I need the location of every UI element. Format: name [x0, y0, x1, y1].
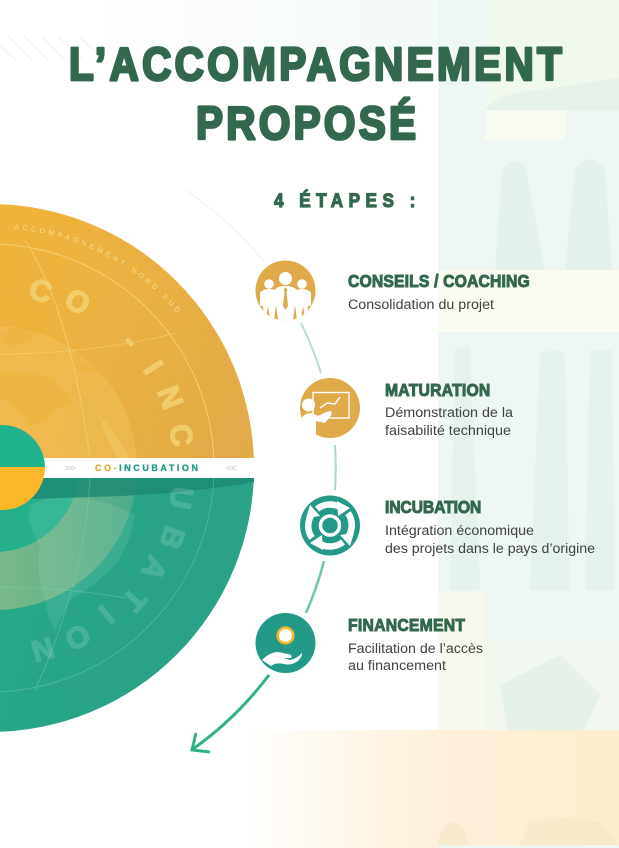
step 4 text: FINANCEMENT [348, 615, 465, 635]
step 3 text: INCUBATION [385, 497, 481, 517]
globe: curved letters CO-INCUBATION: N [28, 630, 58, 667]
globe: curved letters CO-INCUBATION [26, 273, 199, 667]
step 1 text: Consolidation du projet [348, 297, 494, 312]
globe: curved letters CO-INCUBATION: A [134, 550, 173, 586]
step 2 text: MATURATION [385, 380, 490, 400]
title: PROPOSÉ [196, 99, 416, 150]
step 3 text: des projets dans le pays d’origine [385, 541, 595, 556]
globe: curved letters CO-INCUBATION: N [150, 382, 189, 414]
title: L’ACCOMPAGNEMENT [69, 40, 562, 91]
timeline arc [185, 190, 336, 613]
globe: curved letters CO-INCUBATION: - [115, 326, 146, 356]
globe: curved letters CO-INCUBATION: C [162, 422, 199, 449]
globe: upper gold half [0, 204, 254, 458]
step 4 text: Facilitation de l’accès [348, 641, 483, 656]
icon: hand with coin [256, 613, 316, 673]
arrow [192, 675, 269, 752]
globe: curved letters CO-INCUBATION: I [92, 598, 120, 629]
icon: team [256, 260, 316, 322]
globe: curved letters CO-INCUBATION: U [163, 484, 199, 511]
decorative hatch [0, 35, 105, 60]
globe: curved letters CO-INCUBATION: O [59, 617, 95, 657]
step 3 text [385, 497, 595, 556]
globe: curved letters CO-INCUBATION: C [26, 273, 56, 310]
step 2 text [385, 380, 514, 438]
step 4 text: au financement [348, 658, 446, 673]
band label: co-incubation: CO- INCUBATION [95, 463, 198, 473]
band label: co-incubation [64, 463, 237, 473]
step 2 text: Démonstration de la [385, 405, 514, 420]
globe: lower teal half [0, 478, 254, 732]
band label: co-incubation: >>> [64, 463, 76, 473]
globe: curved letters CO-INCUBATION: I [137, 356, 169, 380]
globe: curved letters CO-INCUBATION: O [59, 282, 95, 322]
step 4 text [348, 615, 483, 673]
step 1 text [348, 271, 530, 312]
icon: presentation [300, 378, 360, 438]
globe [0, 204, 254, 732]
band label: co-incubation: <<< [225, 463, 237, 473]
globe: central core [0, 425, 45, 510]
globe: curved letters CO-INCUBATION: B [152, 521, 191, 553]
icon: cycle [300, 496, 360, 556]
step 1 text: CONSEILS / COACHING [348, 271, 530, 291]
step 3 text: Intégration économique [385, 523, 534, 538]
step 2 text: faisabilité technique [385, 423, 511, 438]
globe: curved caption: ACCOMPAGNEMENT NORD-SUD [14, 224, 180, 312]
subheading: 4 étapes: 4 ÉTAPES : [274, 189, 415, 211]
globe: curved letters CO-INCUBATION: T [115, 581, 152, 617]
title [69, 40, 562, 150]
